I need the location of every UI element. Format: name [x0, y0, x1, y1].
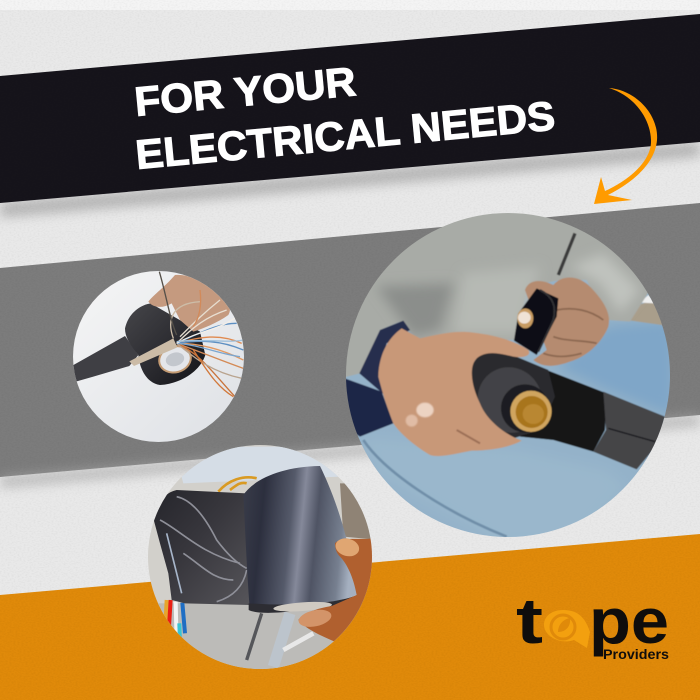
logo icon: tape roll droplet: [544, 610, 590, 648]
band: soft shadow under title band: [0, 142, 700, 217]
wall beige: [340, 483, 370, 539]
foam insulation: [593, 392, 665, 469]
stand poles: [247, 613, 313, 667]
navy cuff: [359, 321, 410, 394]
tape strip: [72, 336, 138, 381]
white backdrop: [73, 271, 244, 442]
sweatshirt shading: [377, 233, 640, 337]
left hand highlights: [406, 403, 480, 443]
white corner: [640, 295, 655, 303]
cable sheath: [129, 338, 177, 366]
brass fitting: [510, 391, 552, 432]
photo: hands wrapping pipe with electrical tape: [340, 210, 680, 550]
tape roll: [125, 303, 205, 385]
sheet creases: [160, 497, 247, 602]
navy trousers: [346, 378, 394, 437]
right hand holding roll: [525, 277, 609, 366]
title line 2: ELECTRICAL NEEDS: [134, 93, 557, 178]
logo word Providers: Providers: [603, 647, 669, 662]
roll core: [158, 345, 192, 374]
logo letter t: t: [516, 585, 543, 657]
photo: wide black tape roll in hand: [148, 445, 372, 669]
left hand: [378, 328, 529, 456]
title: [133, 58, 557, 178]
jeans: [346, 280, 670, 537]
foam end: [466, 349, 555, 438]
wires: [165, 600, 185, 643]
workshop backdrop: [148, 445, 372, 669]
band: grey middle band: [0, 203, 700, 477]
backdrop corner: [630, 302, 662, 326]
wires: [159, 272, 243, 397]
knuckle shading: [543, 309, 603, 356]
orange strap: [218, 477, 257, 492]
photo: tape roll with stripped wires: [73, 271, 244, 442]
wide roll: [243, 466, 358, 606]
jeans shading: [360, 320, 673, 543]
tape roll: [514, 288, 558, 355]
finger: [297, 607, 333, 630]
arrow: curved orange arrow: [594, 88, 657, 204]
band: orange footer band: [0, 534, 700, 700]
sky window: [173, 447, 340, 483]
title line 1: FOR YOUR: [133, 58, 358, 125]
hand: [148, 275, 230, 332]
logo: Tape Providers: [516, 585, 669, 662]
band: shadow under grey band: [0, 415, 700, 487]
band: black title band: [0, 14, 700, 203]
logo letters pe: pe: [589, 585, 669, 657]
hand: [298, 538, 380, 644]
roll core: [273, 600, 332, 613]
tape sheet: [153, 490, 250, 605]
floor: [158, 604, 362, 669]
sweatshirt: [340, 210, 650, 378]
thumbnail: [333, 536, 361, 559]
foam inner: [478, 367, 540, 433]
roll edge: [249, 594, 359, 613]
black tape on pipe: [520, 370, 607, 452]
foam slit: [608, 428, 655, 442]
